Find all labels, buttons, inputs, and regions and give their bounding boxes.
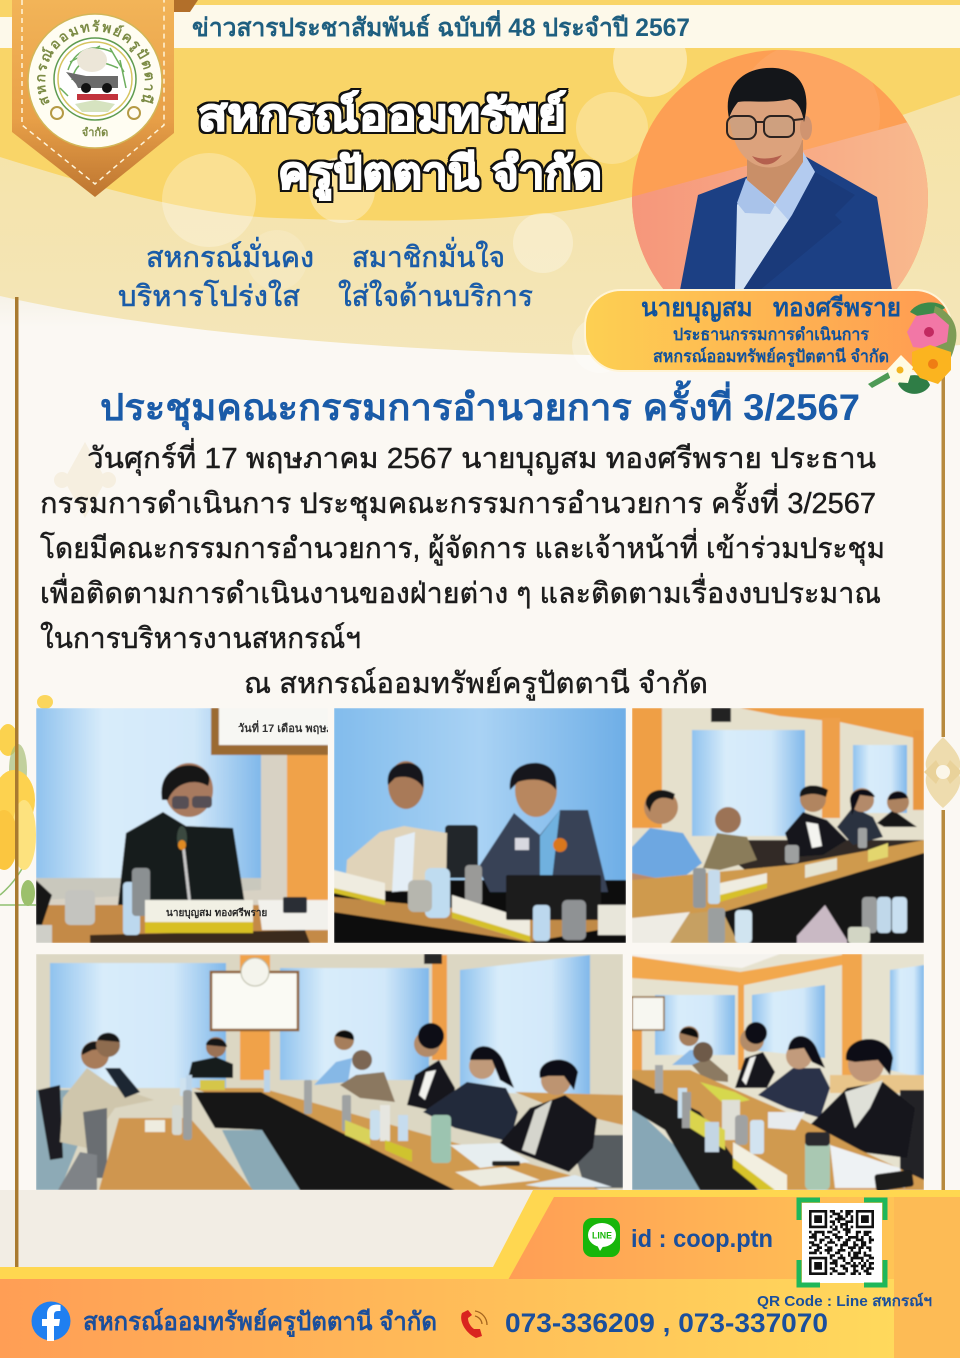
side gold lines: [15, 297, 945, 1267]
shirt: [735, 152, 815, 290]
footer panel: [0, 1190, 960, 1358]
laptop: [506, 875, 601, 920]
line id: id : coop.ptn: [631, 1225, 773, 1253]
table items: [180, 1078, 187, 1096]
chairman organisation: สหกรณ์ออมทรัพย์ครูปัตตานี จำกัด: [653, 346, 889, 368]
main title: ครูปัตตานี จำกัด: [278, 149, 602, 200]
name plate right: [452, 895, 530, 942]
main title: สหกรณ์ออมทรัพย์: [198, 90, 566, 140]
body paragraph: ในการบริหารงานสหกรณ์ฯ: [40, 621, 361, 655]
QR modules: [809, 1210, 874, 1275]
name plate left: [334, 870, 385, 905]
hair: [728, 68, 806, 122]
name plate on table: [145, 900, 253, 922]
chairman name: นายบุญสม ทองศรีพราย: [641, 294, 901, 324]
photo 1: chairman speaking: [36, 708, 355, 943]
portrait: chairman in circle: [632, 50, 928, 289]
glasses: [727, 116, 803, 139]
man in dark jacket: [478, 810, 608, 892]
photo 2: two committee members: [334, 708, 626, 943]
table: [194, 1088, 600, 1190]
man in black jacket: [118, 812, 245, 905]
documents and bottles: [700, 1082, 750, 1105]
QR caption: QR Code : Line สหกรณ์ฯ: [757, 1292, 932, 1310]
ribbon badge: [12, 0, 198, 197]
header background waves: [0, 0, 960, 420]
name plates: [720, 873, 767, 900]
logo: cooperative seal: สหกรณ์ออมทรัพย์ครูปัตตานี: [37, 20, 154, 106]
table top: [632, 1070, 924, 1190]
man in beige jacket: [345, 826, 447, 892]
main title: [198, 90, 602, 200]
floor: [632, 1109, 701, 1190]
photo 1: chairman speaking: วันที่ 17 เดือน พฤษภาคม: [238, 720, 355, 735]
chairs and people on left: [38, 1085, 63, 1160]
chairman position: ประธานกรรมการดำเนินการ: [673, 325, 870, 344]
ornament: right thai motif: [924, 737, 960, 808]
phone numbers: 073-336209 , 073-337070: [505, 1308, 828, 1338]
motto: บริหารโปร่งใส: [118, 279, 300, 313]
table: [334, 897, 626, 942]
right table far: [515, 1092, 623, 1125]
motto: สหกรณ์มั่นคง: [146, 237, 314, 274]
body paragraph: ณ สหกรณ์ออมทรัพย์ครูปัตตานี จำกัด: [244, 667, 708, 701]
motto: ใส่ใจด้านบริการ: [338, 279, 533, 313]
motto: สมาชิกมั่นใจ: [352, 237, 505, 274]
newsletter issue strip: [0, 5, 960, 48]
ornament: faint left motif: [54, 442, 116, 518]
right side people: [314, 1058, 352, 1085]
water bottle and thermos: [123, 882, 140, 935]
icon: phone: [461, 1310, 487, 1338]
icon: LINE: [583, 1218, 620, 1257]
people: [672, 1050, 700, 1065]
QR code: [799, 1200, 885, 1285]
photo 3: meeting table side view: [632, 708, 924, 943]
facebook page name: สหกรณ์ออมทรัพย์ครูปัตตานี จำกัด: [83, 1307, 437, 1338]
name plate: [585, 290, 951, 371]
body paragraph: เพื่อติดตามการดำเนินงานของฝ่ายต่าง ๆ และติดตามเรื่องงบประมาณ: [40, 573, 881, 610]
body paragraph: โดยมีคณะกรรมการอำนวยการ, ผู้จัดการ และเจ้าหน้าที่ เข้าร่วมประชุม: [40, 528, 885, 566]
tropical flowers: [868, 302, 956, 394]
logo: cooperative seal: [27, 13, 163, 149]
bottles: [425, 868, 450, 918]
photo 1: chairman speaking: นายบุญสม ทองศรีพราย: [166, 907, 267, 919]
decorative yellow flowers at left: [0, 695, 53, 906]
body paragraph: วันศุกร์ที่ 17 พฤษภาคม 2567 นายบุญสม ทองศรีพราย ประธาน: [87, 438, 876, 476]
QR green corners: [799, 1200, 885, 1285]
meeting heading: ประชุมคณะกรรมการอำนวยการ ครั้งที่ 3/2567: [100, 380, 860, 431]
table: [36, 905, 328, 943]
chair at head of table: [188, 1057, 233, 1078]
participants: [703, 833, 757, 870]
logo: cooperative seal: จำกัด: [82, 126, 108, 139]
suit: [680, 155, 892, 290]
body paragraph: กรรมการดำเนินการ ประชุมคณะกรรมการอำนวยการ ครั้งที่ 3/2567: [40, 482, 876, 521]
table: [632, 840, 924, 925]
motto: [118, 237, 533, 313]
small board: [632, 997, 664, 1030]
neck and face: [747, 140, 803, 204]
icon: Facebook: [32, 1302, 70, 1341]
icon: LINE: LINE: [592, 1230, 612, 1240]
notice board: [211, 972, 298, 1030]
photo 5: meeting table close view: [632, 954, 924, 1192]
photo 4: wide meeting room: [36, 954, 623, 1190]
thermoses and bottles: [693, 868, 706, 908]
body paragraph: [40, 438, 885, 701]
issue heading: ข่าวสารประชาสัมพันธ์ ฉบับที่ 48 ประจำปี 2567: [192, 10, 690, 42]
